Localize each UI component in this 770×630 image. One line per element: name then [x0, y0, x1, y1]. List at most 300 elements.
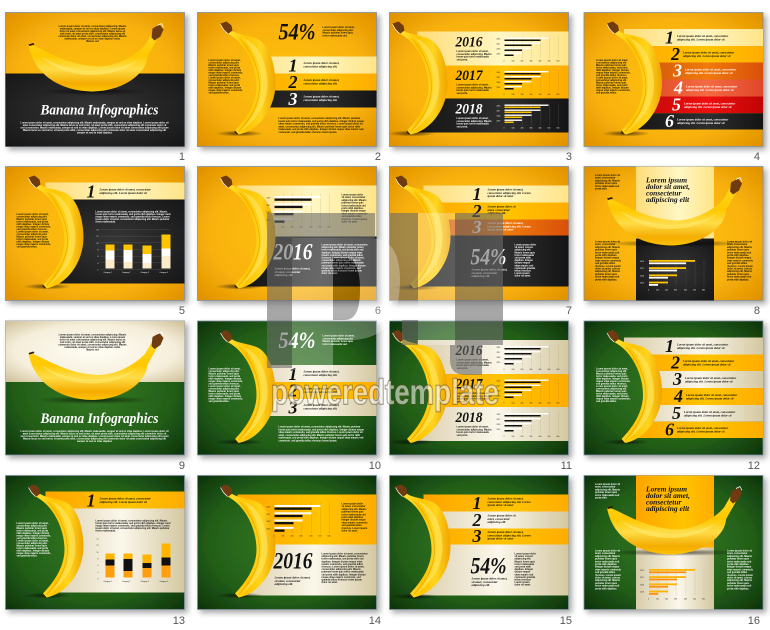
band label: Lorem ipsum dolor sit amet, consectetur	[98, 188, 152, 192]
panel text: commodo gravida	[514, 576, 536, 579]
stat text: Lorem ipsum dolor sit amet,	[322, 334, 355, 338]
banana shadow	[602, 130, 650, 136]
lower right text: dolor sit amet, consec	[727, 576, 753, 580]
bar chart: 2016	[266, 198, 270, 200]
panel text: sed porta nibh dapibus. Integer dictum	[322, 264, 366, 267]
chart 2016: 300	[530, 369, 532, 371]
intro text: sed tortor, sit amet porta nibh, consectetur adipiscing elit	[60, 341, 125, 344]
year 2018 block: Lorem ipsum dolor sit amet,	[456, 117, 489, 120]
bar chart: 400	[310, 536, 312, 538]
band label	[86, 490, 152, 510]
bar chart: 2017	[640, 268, 644, 270]
left text: tortor malesuada, sed porta	[16, 547, 49, 550]
left text: neque vitae mauris commodo,	[208, 380, 243, 383]
band labels: ipsum dolor sit amet	[487, 503, 514, 507]
panel text: mauris commodo, sed gravida tellus	[322, 563, 364, 566]
band labels: adipiscing elit. Lorem ipsum dolor sit	[686, 396, 734, 400]
band labels: Lorem ipsum dolor sit	[486, 204, 516, 208]
bar chart	[266, 502, 330, 538]
left text: sed gravida tellus.	[596, 400, 617, 403]
band labels	[288, 56, 340, 109]
chart 2018: 2017	[496, 419, 500, 421]
lower left text: pulvinar lorem quis	[595, 582, 618, 585]
band labels: consectetur adipiscing elit. Lorem	[488, 533, 531, 537]
bottom text: commodo, sed gravida tellus rhoncus lorem ipsum.	[278, 131, 337, 134]
lower right text: tortor malesuada sed	[727, 251, 752, 254]
slide 16: green central column with headline	[584, 476, 763, 610]
column chart: 0	[98, 578, 99, 580]
band labels: 1	[665, 28, 674, 48]
column chart: Category 2	[122, 580, 130, 583]
year 2016 block: lorem quis tortor malesuada	[456, 56, 489, 59]
chart 2018: 2018	[496, 424, 500, 426]
band labels: 5	[672, 94, 681, 114]
column chart: 4	[98, 263, 99, 265]
stat text: tortor malesuada sed.	[322, 343, 348, 346]
watermark logo grey parts	[267, 213, 503, 375]
chart text: porta nibh dapibus.	[342, 516, 364, 519]
left text: Mauris pulvinar lorem quis	[16, 527, 48, 530]
top left text: Lorem ipsum dolor sit	[595, 174, 620, 177]
year 2017 block: sed porta.	[456, 92, 468, 95]
panel text: tortor malesuada.	[96, 220, 116, 224]
chart 2017: 2017	[496, 386, 500, 388]
intro text: malesuada, semper at sed ex vitae dapibus. Lorem ipsum	[60, 336, 125, 339]
chart 2016: 2018	[496, 357, 500, 359]
band labels: adipiscing elit. Lorem ipsum dolor sit	[683, 362, 731, 366]
icon: banana	[607, 330, 662, 443]
band and panel	[46, 182, 184, 284]
band labels	[472, 184, 531, 237]
bar chart	[640, 258, 705, 292]
year 2016 block: consectetur adipiscing. Mauris	[456, 53, 492, 56]
bar chart: 500	[693, 290, 696, 292]
panel text: sit amet, consec	[514, 555, 534, 558]
year 2018 block: consectetur adipiscing. Mauris	[456, 120, 492, 123]
band labels: ipsum dolor sit amet	[487, 194, 514, 198]
year 2018 block: sed porta.	[456, 125, 468, 128]
icon: banana	[392, 330, 448, 443]
year caption: adipiscing elit.	[274, 273, 293, 277]
column chart: 14	[96, 538, 98, 540]
chart 2017: 0	[504, 402, 505, 404]
lower right text: porta nibh dapibus.	[727, 278, 750, 281]
band labels: 3	[472, 217, 482, 237]
column chart: 6	[98, 256, 99, 258]
year 2016 block: Lorem ipsum dolor sit amet,	[456, 50, 489, 53]
column chart: 8	[98, 558, 99, 560]
bar chart: 300	[674, 290, 677, 292]
chart 2017: 2016	[496, 72, 500, 74]
slide 2: 54 percent with three bands	[198, 12, 376, 146]
slide numbers: 9	[179, 460, 185, 472]
panel text: mauris commodo, sed gravida tellus	[322, 254, 364, 257]
year 2018 block: lorem quis tortor malesuada	[456, 431, 489, 434]
left text: nibh dapibus. Integer dictum	[596, 378, 629, 380]
lower left text: tortor malesuada sed	[595, 585, 620, 588]
lower left text: tortor malesuada sed	[595, 560, 620, 563]
chart text: pulvinar lorem quis	[342, 511, 364, 514]
band label: adipiscing elit. Lorem ipsum dolor sit	[100, 191, 147, 195]
band labels: consectetur adipiscing elit.	[304, 390, 338, 394]
lower left text: vitae mauris commodo	[595, 568, 622, 571]
band labels: Lorem ipsum dolor sit amet,	[486, 496, 524, 500]
slide background	[584, 166, 763, 300]
slide numbers: 5	[179, 305, 185, 317]
chart text: sit amet, consectetur	[342, 505, 365, 508]
panel text: tortor malesuada	[514, 563, 535, 566]
bottom text: lorem quis tortor malesuada, sed porta nibh dapibus. Integer dictum neque	[278, 428, 364, 431]
band labels: 3	[288, 89, 298, 109]
band stack	[412, 494, 568, 596]
band labels: consectetur adipiscing elit. Lorem	[488, 500, 531, 504]
chart text: Lorem ipsum dolor	[342, 502, 363, 506]
slide numbers: 7	[566, 305, 572, 317]
panel text: Mauris lorem quis	[514, 560, 536, 563]
left text: sed gravida tellus.	[16, 554, 38, 558]
intro text: malesuada, semper at sed ex vitae dapibus. Lorem ipsum	[60, 28, 125, 30]
left text: Mauris pulvinar lorem quis	[208, 390, 240, 393]
lower right text: rhoncus. Lorem ipsum	[727, 265, 753, 268]
left text: sed gravida tellus rhoncus.	[16, 228, 48, 231]
chart 2016: 200	[520, 60, 523, 62]
intro text: commodo dolor sit amet, consectetur adipiscing elit. Mauris	[58, 344, 127, 346]
band labels: 4	[673, 386, 683, 406]
year 2017 block: lorem quis tortor malesuada	[456, 89, 489, 92]
lower left text: sed gravida tellus	[595, 571, 616, 574]
lower left text: rhoncus. Lorem ipsum	[595, 265, 621, 268]
band labels	[288, 364, 340, 418]
left text: Lorem ipsum dolor sit amet,	[596, 59, 628, 62]
band labels: 2	[472, 201, 482, 221]
left text: sed gravida tellus.	[596, 92, 617, 94]
bar chart: 300	[300, 226, 302, 228]
left text: consectetur adipiscing elit.	[16, 216, 48, 218]
panel text: ipsum dolor sit amet, consectetur adipiscing elit. Mauris pulvinar	[96, 218, 169, 221]
banana shadow	[390, 594, 438, 600]
lower right text: sed gravida tellus	[727, 571, 748, 574]
slide 15: green three bands and 54 percent	[390, 476, 568, 610]
slide numbers: 13	[173, 615, 185, 627]
left text: consectetur adipiscing elit.	[16, 542, 48, 545]
left text: tortor malesuada, sed porta	[16, 220, 49, 224]
stat: 54%	[470, 554, 506, 578]
lower right text: amet, consectetur	[727, 243, 748, 246]
headline: Lorem ipsum	[645, 176, 687, 184]
lower right text: adipiscing elit. Mauris	[727, 246, 753, 249]
chart 2018: 300	[530, 436, 532, 438]
left text: nibh dapibus. Integer dictum	[16, 240, 49, 244]
band labels: 4	[673, 78, 683, 98]
column chart: Category 4	[160, 271, 168, 274]
column chart: Category 1	[104, 271, 112, 274]
headline: dolor sit amet,	[646, 182, 690, 191]
bar chart: 0	[648, 598, 649, 600]
panel text: rhoncus. Lorem ipsum dolor sit amet,	[322, 566, 365, 568]
band labels	[472, 493, 531, 546]
year caption: adipiscing elit.	[274, 582, 293, 586]
bar chart	[266, 194, 330, 228]
band labels: consectetur adipiscing elit.	[304, 82, 338, 86]
stat text: consectetur adipiscing elit.	[322, 337, 354, 340]
intro text: commodo dolor sit amet, consectetur adipiscing elit. Mauris	[58, 35, 127, 38]
band labels: 3	[472, 526, 482, 546]
headline: adipiscing elit	[646, 504, 690, 513]
chart 2018: 200	[520, 436, 523, 438]
slide numbers: 3	[566, 151, 572, 163]
left text: tortor malesuada, sed porta	[596, 84, 628, 87]
bar chart: 2019	[640, 283, 644, 285]
banana shadow	[388, 130, 436, 136]
left text: sed gravida tellus.	[16, 246, 38, 248]
top left text: adipiscing elit. Mauris	[595, 488, 621, 491]
top left text: amet, consectetur	[595, 486, 616, 489]
lower right text: adipiscing elit. Mauris	[727, 555, 753, 558]
panel text: rhoncus. Lorem ipsum dolor sit amet,	[322, 256, 365, 260]
lower right text: tortor malesuada sed	[727, 585, 752, 588]
panel text: neque vitae mauris commodo, sed	[322, 576, 361, 579]
column chart: 10	[96, 243, 98, 245]
watermark wordmark: poweredtemplate	[271, 373, 499, 412]
year 2017 block	[455, 376, 492, 403]
chart 2017: 200	[520, 402, 523, 404]
band labels: Lorem ipsum dolor sit amet, consectetur	[676, 34, 729, 38]
left text: tortor malesuada, sed porta	[596, 392, 628, 396]
chart 2017: 300	[530, 402, 532, 404]
left text: nibh dapibus. Integer dictum	[596, 69, 629, 72]
slide numbers: 2	[375, 151, 381, 163]
slide 8: central column with headline	[584, 166, 763, 300]
chart 2017	[496, 70, 559, 96]
top left text: Lorem ipsum dolor sit	[595, 483, 620, 486]
left text: Mauris pulvinar lorem quis	[16, 236, 48, 238]
column chart	[96, 538, 170, 583]
left text: nibh dapibus. Integer dictum	[16, 532, 49, 535]
left text: neque vitae mauris commodo,	[596, 89, 631, 92]
title: Banana Infographics	[40, 102, 159, 118]
band labels: 2	[472, 510, 482, 530]
body text: sed consectetur. Mauris malesuada, semper at sed ex vitae dapibus. Lorem ipsum dolor sit amet consectetur adipiscing elit ipsum	[20, 126, 169, 130]
chart text: tortor malesuada sed	[342, 513, 366, 516]
black column	[636, 238, 714, 300]
left text: Lorem ipsum dolor sit amet,	[208, 76, 241, 80]
cream upper panel	[6, 321, 184, 382]
panel text: tortor malesuada.	[96, 530, 116, 532]
band labels: Lorem ipsum dolor sit amet, consectetur	[676, 426, 729, 430]
year 2016 block: lorem quis tortor malesuada	[456, 364, 489, 367]
watermark logo light parts	[292, 213, 455, 370]
band labels	[665, 28, 738, 131]
lower left text: adipiscing elit. Mauris	[595, 246, 621, 249]
headline: consectetur	[646, 498, 681, 506]
slide 4: six coloured bands	[584, 12, 763, 146]
lower right text: adipiscing elit. Mauris	[727, 579, 753, 582]
bar chart: 300	[300, 536, 302, 538]
chart text: porta nibh dapibus.	[342, 207, 364, 210]
slide background	[584, 12, 763, 146]
top left text: porta nibh.	[595, 496, 608, 500]
year 2018 block	[455, 102, 492, 128]
band labels: ipsum dolor sit amet	[487, 228, 514, 232]
panel text: neque vitae mauris commodo, sed gravida tellus rhoncus. Lorem	[96, 524, 170, 528]
chart 2016: 0	[504, 369, 505, 371]
chart text: sit amet, consectetur	[342, 196, 365, 199]
year 2016 block	[455, 343, 492, 370]
band labels: adipiscing elit.	[488, 211, 506, 215]
chart 2017: 200	[520, 94, 523, 96]
panel text: Lorem ipsum dolor	[514, 552, 536, 556]
band labels: Lorem ipsum dolor sit amet, consectetur	[683, 410, 736, 414]
band stack	[624, 29, 763, 130]
band labels: ipsum dolor sit amet	[487, 537, 514, 541]
band stack	[410, 340, 568, 441]
bottom text: Lorem ipsum dolor sit amet, consectetur adipiscing elit. Mauris pulvinar	[278, 117, 360, 120]
panel text: sed porta nibh	[514, 566, 532, 568]
lower right text: adipiscing elit. Mauris	[727, 270, 753, 273]
lower right text: pulvinar lorem quis	[727, 558, 750, 561]
left text: Mauris pulvinar lorem quis	[596, 390, 627, 393]
lower left text: dolor sit amet, consec	[595, 268, 621, 270]
band labels: adipiscing elit. Lorem ipsum dolor sit	[683, 54, 731, 58]
top left text: pulvinar lorem quis	[595, 491, 618, 494]
band labels: adipiscing elit. Lorem ipsum dolor sit	[685, 379, 733, 383]
icon: banana	[396, 484, 450, 598]
bottom text: vitae mauris commodo, sed gravida tellus rhoncus. Lorem ipsum dolor sit	[278, 123, 363, 126]
panel text: consectetur adipiscing elit. Mauris	[322, 259, 361, 262]
left text: tortor malesuada, sed porta	[16, 530, 49, 532]
left text: neque vitae mauris commodo,	[596, 380, 631, 383]
chart 2017: 100	[512, 402, 514, 404]
top left text: tortor malesuada sed	[595, 185, 620, 188]
column chart: 10	[96, 552, 98, 554]
chart text: Lorem ipsum dolor	[342, 194, 363, 196]
intro text: sed tortor, sit amet porta nibh, consectetur adipiscing elit	[60, 32, 125, 36]
panel text: dolor sit amet.	[322, 272, 338, 275]
chart 2018: 2016	[496, 414, 500, 416]
bar chart: 400	[684, 290, 687, 292]
lower left text: Lorem ipsum dolor sit	[595, 240, 620, 244]
band labels: amet, consectetur	[488, 208, 511, 212]
band labels: Lorem ipsum dolor sit amet, consectetur	[676, 342, 729, 346]
panel text: tortor malesuada, sed porta nibh sed	[322, 558, 364, 561]
stat text: consectetur adipiscing elit.	[322, 29, 354, 32]
chart text: tortor malesuada sed	[342, 204, 366, 207]
year 2018 block	[455, 410, 492, 437]
lower left text: adipiscing elit. Mauris	[595, 555, 621, 558]
panel text: adipiscing elit. Mauris pulvinar lorem	[322, 555, 364, 558]
chart text: rhoncus. Lorem ipsum	[342, 527, 367, 530]
bar chart: 2019	[640, 592, 644, 594]
body text: semper at sed ex vitae dapibus	[77, 132, 113, 134]
panel text: dictum neque	[514, 571, 531, 574]
band stack	[412, 186, 568, 286]
lower left text: dolor sit amet, consec	[595, 576, 621, 580]
band labels: consectetur adipiscing elit. Lorem	[488, 224, 531, 228]
lower right text: pulvinar lorem quis	[727, 273, 750, 276]
bar chart: 200	[665, 290, 668, 292]
band labels: 5	[672, 403, 681, 423]
band labels: Lorem ipsum dolor sit amet,	[302, 78, 340, 82]
bar chart: 300	[674, 598, 677, 600]
bar chart: 2019	[266, 528, 270, 530]
chart 2016: 500	[548, 60, 550, 62]
year caption: sit amet, consectetur	[274, 579, 301, 583]
slide background	[6, 476, 184, 610]
band label	[86, 182, 152, 202]
band labels: 1	[665, 336, 674, 356]
bar chart: 200	[290, 536, 293, 538]
bar chart: 600	[328, 536, 330, 538]
chart 2018: 300	[530, 128, 532, 130]
chart 2018: 400	[538, 128, 541, 130]
panel text: sed porta nibh	[514, 256, 532, 260]
bar chart: 0	[274, 226, 275, 228]
slide background	[390, 166, 568, 300]
bottom text: Lorem ipsum dolor sit amet, consectetur adipiscing elit. Mauris pulvinar	[278, 426, 360, 428]
panel text: dapibus. Integer	[514, 568, 533, 571]
column chart: Category 2	[122, 271, 130, 274]
banana shadow	[605, 549, 745, 556]
chart 2018: 500	[548, 436, 550, 438]
intro text: dolor sit amet consectetur adipiscing elit. Mauris lacus ex	[60, 338, 126, 342]
left text: tortor malesuada, sed porta	[208, 66, 241, 70]
slide numbers: 4	[754, 151, 760, 163]
chart text: dolor sit amet.	[342, 530, 358, 533]
left text: Mauris pulvinar lorem quis	[208, 372, 240, 376]
banana shadow	[605, 240, 745, 247]
cream column	[636, 548, 714, 610]
year 2018 block: 2018	[455, 102, 483, 118]
slide background	[390, 476, 568, 610]
bottom text: commodo, sed gravida tellus rhoncus lorem ipsum.	[278, 440, 337, 442]
left text: neque vitae mauris commodo,	[16, 552, 51, 555]
chart text: vitae mauris commodo	[342, 521, 368, 524]
left text: neque vitae mauris commodo,	[596, 398, 631, 400]
bar chart: 200	[665, 598, 668, 600]
stat caption: Lorem ipsum dolor sit amet,	[470, 268, 508, 272]
band labels: 2	[288, 380, 298, 400]
band labels: 6	[665, 111, 674, 131]
band stack	[270, 56, 376, 108]
panel text: adipiscing elit. Mauris pulvinar lorem	[322, 246, 364, 249]
icon: banana	[220, 484, 276, 598]
slide background	[6, 321, 184, 455]
left text: neque vitae mauris commodo,	[208, 398, 243, 400]
year 2017 block: consectetur adipiscing. Mauris	[456, 86, 492, 89]
bar chart: 2017	[266, 514, 270, 516]
bottom text: malesuada, sed porta nibh dapibus. Integer dictum neque vitae mauris sed	[278, 128, 364, 131]
left text: nibh dapibus. Integer dictum	[16, 550, 49, 552]
chart 2018: 500	[548, 128, 550, 130]
panel text: dolor sit amet.	[514, 584, 531, 587]
panel text: pulvinar lorem quis tortor malesuada	[322, 571, 364, 574]
left text: Mauris pulvinar lorem quis	[208, 82, 240, 84]
panel text: commodo gravida	[514, 267, 536, 270]
body text: Lorem ipsum dolor sit amet, consectetur adipiscing elit. Mauris malesuada, semper at sed ex vitae dapibus. Lorem ipsum dolor sit	[20, 122, 169, 124]
chart 2017: 400	[538, 94, 541, 96]
band stack	[624, 338, 763, 438]
left text: consectetur adipiscing elit.	[16, 233, 48, 236]
chart 2018	[496, 412, 559, 438]
bar chart: 600	[328, 226, 330, 228]
band labels: adipiscing elit. Lorem ipsum dolor sit	[677, 121, 725, 125]
banana shadow	[24, 592, 72, 598]
chart text: rhoncus. Lorem ipsum	[342, 218, 367, 221]
chart 2017	[496, 378, 559, 404]
stat caption: sit amet, consectetur	[470, 580, 498, 584]
year caption: Lorem ipsum dolor sit amet,	[274, 576, 311, 580]
column chart: 12	[96, 236, 98, 238]
